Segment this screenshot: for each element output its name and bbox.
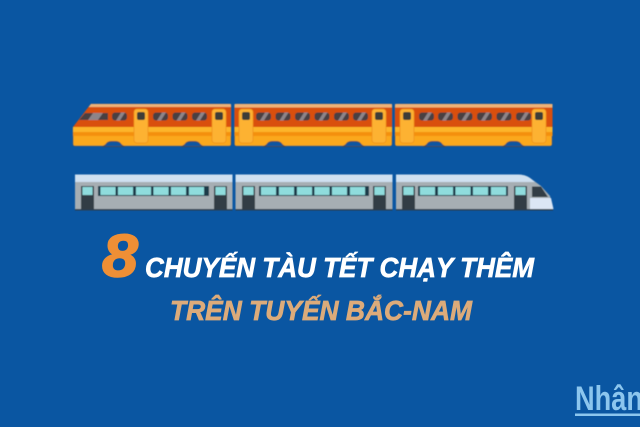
orange carriage 3 [395,104,552,146]
grey carriage 1 [75,174,232,210]
number 8: 8 [102,222,139,290]
grey carriage 3 with locomotive nose [396,174,554,210]
orange carriage 1 [73,104,231,146]
orange train [73,104,552,146]
grey carriage 2 [236,174,392,210]
headline line 2: TRÊN TUYẾN BẮC-NAM [170,295,473,326]
orange carriage 2 [234,104,392,146]
grey train [75,174,554,210]
headline line 1: CHUYẾN TÀU TẾT CHẠY THÊM [145,252,535,283]
